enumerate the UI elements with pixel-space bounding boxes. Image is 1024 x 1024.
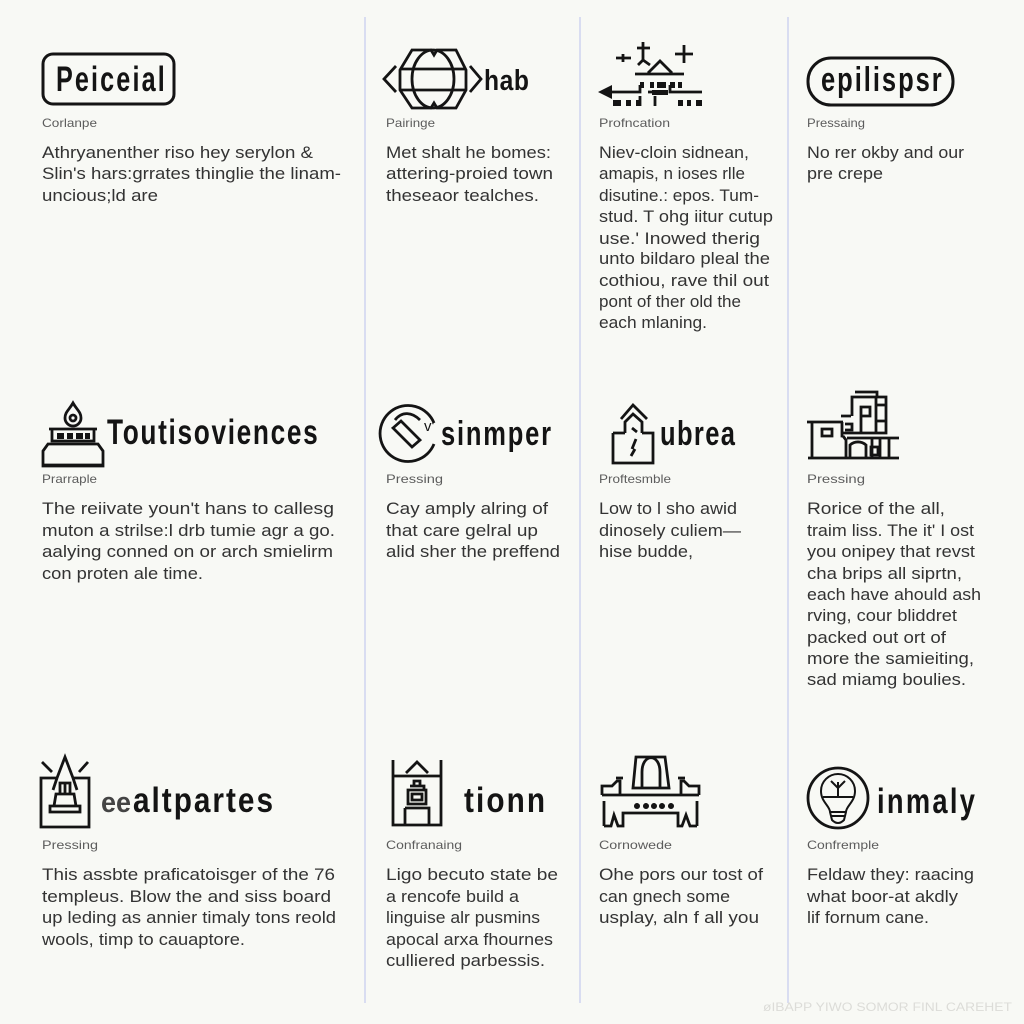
body text: linguise alr pusmins	[386, 908, 540, 927]
body text: what boor-at akdly	[806, 887, 959, 906]
body text: traim liss. The it' I ost	[807, 521, 974, 540]
body text: each mlaning.	[599, 313, 707, 332]
body text: Slin's hars:grrates thinglie the linam-	[42, 164, 341, 183]
panel: sinmper	[380, 406, 560, 561]
body text	[386, 865, 558, 970]
watermark: øIBAPP YIWO SOMOR FINL CAREHET	[763, 1000, 1013, 1014]
body text: The reiivate youn't hans to callesg	[42, 499, 334, 518]
body text: Feldaw they: raacing	[807, 865, 974, 884]
body text: dinosely culiem—	[599, 521, 741, 540]
body text: unto bildaro pleal the	[599, 249, 770, 268]
body text: you onipey that revst	[807, 542, 975, 561]
body text: can gnech some	[599, 887, 730, 906]
body text: Athryanenther riso hey serylon &	[42, 143, 314, 162]
label: Pressing	[42, 838, 98, 852]
body text	[386, 499, 560, 561]
heading badge: Peiceial: Peiceial	[56, 60, 165, 99]
heading: hab: hab	[484, 64, 529, 96]
body text: a rencofe build a	[386, 887, 520, 906]
body text	[599, 499, 741, 561]
panel: inmaly	[806, 768, 975, 927]
body text	[807, 143, 964, 183]
body text: packed out ort of	[807, 628, 946, 647]
heading badge: epilispsr: epilispsr	[821, 62, 942, 99]
body text: pre crepe	[807, 164, 883, 183]
body text: alid sher the preffend	[386, 542, 560, 561]
label: Profncation	[599, 116, 670, 130]
body text: Met shalt he bomes:	[386, 143, 551, 162]
panel: hab	[384, 50, 553, 205]
body text: Low to l sho awid	[599, 499, 737, 518]
body text	[806, 865, 974, 927]
body text: apocal arxa fhournes	[386, 930, 553, 949]
body text	[599, 143, 773, 332]
icon: spire in square	[41, 757, 89, 827]
body text: Niev-cloin sidnean,	[599, 143, 749, 162]
body text: wools, timp to cauaptore.	[41, 930, 245, 949]
heading: inmaly: inmaly	[877, 782, 975, 821]
body text: Ligo becuto state be	[386, 865, 558, 884]
icon: castle gate	[602, 757, 699, 826]
body text: amapis, n ioses rlle	[599, 164, 745, 183]
body text: culliered parbessis.	[386, 951, 545, 970]
panel: Cornowede	[599, 757, 763, 927]
body text: sad miamg boulies.	[807, 670, 966, 689]
heading: ubrea: ubrea	[660, 416, 735, 453]
body text: use.' Inowed therig	[599, 229, 760, 248]
body text: up leding as annier timaly tons reold	[42, 908, 336, 927]
body text: theseaor tealches.	[386, 186, 539, 205]
body text: muton a strilse:l drb tumie agr a go.	[42, 521, 335, 540]
heading: sinmper: sinmper	[441, 416, 551, 453]
panel: altpartes	[41, 757, 336, 949]
icon: building	[807, 392, 899, 458]
icon: flame on temple	[43, 403, 103, 466]
body text	[42, 499, 335, 583]
heading: altpartes: altpartes	[133, 781, 273, 820]
body text	[41, 865, 336, 949]
icon: circled tool	[380, 406, 434, 462]
body text: cothiou, rave thil out	[599, 271, 769, 290]
label: Pressing	[386, 472, 443, 486]
label: Pressaing	[807, 116, 865, 130]
icon: globe hexagon	[384, 50, 481, 108]
body text: pont of ther old the	[599, 292, 741, 311]
icon: lightbulb in circle	[808, 768, 868, 828]
body text: con proten ale time.	[42, 564, 203, 583]
body text: that care gelral up	[386, 521, 538, 540]
body text: This assbte praficatoisger of the 76	[42, 865, 335, 884]
body text: Ohe pors our tost of	[599, 865, 763, 884]
body text: aalying conned on or arch smielirm	[42, 542, 333, 561]
heading badge: epilispsr	[808, 58, 953, 105]
label: Confranaing	[386, 838, 462, 852]
label: Confremple	[807, 838, 879, 852]
body text: usplay, aln f all you	[599, 908, 759, 927]
label: Proftesmble	[599, 472, 671, 486]
panel: tionn	[386, 760, 558, 970]
body text	[807, 499, 981, 689]
heading badge: Peiceial	[43, 54, 174, 104]
body text: uncious;ld are	[42, 186, 158, 205]
body text: Rorice of the all,	[807, 499, 945, 518]
body text: attering-proied town	[386, 164, 553, 183]
heading: tionn: tionn	[464, 781, 545, 820]
body text: templeus. Blow the and siss board	[42, 887, 331, 906]
body text: each have ahould ash	[807, 585, 981, 604]
heading: sinmper: v'	[424, 418, 434, 435]
icon: temple in frame	[393, 760, 441, 825]
label: Prarraple	[42, 472, 97, 486]
body text: cha brips all siprtn,	[807, 564, 962, 583]
panel: Toutisoviences	[42, 403, 335, 583]
label: Pairinge	[386, 116, 435, 130]
panel: Profncation	[598, 42, 773, 332]
body text: stud. T ohg iitur cutup	[599, 207, 773, 226]
panel: Peiceial	[42, 54, 341, 205]
icon: chevron house	[613, 405, 653, 463]
label: Cornowede	[599, 838, 672, 852]
body text: hise budde,	[599, 542, 693, 561]
body text	[599, 865, 763, 927]
body text: rving, cour bliddret	[807, 606, 957, 625]
body text: disutine.: epos. Tum-	[599, 186, 759, 205]
body text: Cay amply alring of	[386, 499, 548, 518]
panel: epilispsr	[807, 58, 964, 183]
body text: more the samieiting,	[807, 649, 974, 668]
label: Corlanpe	[42, 116, 97, 130]
body text: No rer okby and our	[807, 143, 964, 162]
heading: altpartes: ee	[101, 787, 131, 819]
heading: Toutisoviences: Toutisoviences	[107, 412, 318, 452]
panel: Pressing building	[807, 392, 981, 689]
body text	[386, 143, 553, 205]
panel: ubrea	[599, 405, 741, 561]
body text	[42, 143, 341, 205]
icon: church with crosses	[598, 42, 702, 106]
body text: lif fornum cane.	[807, 908, 929, 927]
label: Pressing	[807, 472, 865, 486]
